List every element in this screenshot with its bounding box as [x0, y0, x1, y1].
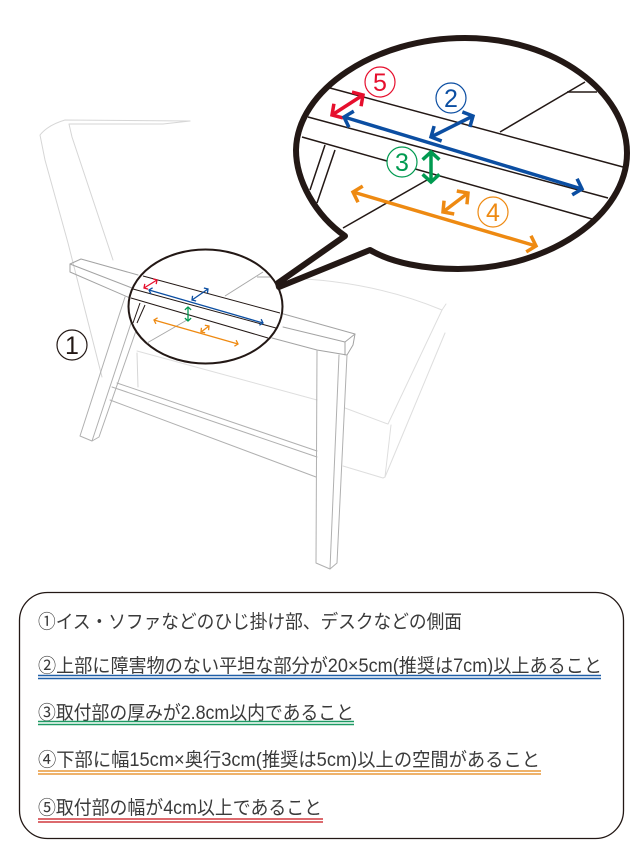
- front right leg: [316, 351, 347, 569]
- arrow 3: thickness: [429, 152, 433, 182]
- bubble outline: [278, 38, 627, 287]
- front left leg: [80, 297, 145, 441]
- arrow 2: flat length: [344, 117, 582, 189]
- number 4: 4: [486, 199, 500, 227]
- arrow 2: flat depth: [431, 116, 473, 137]
- number 4: [478, 197, 508, 227]
- speech bubble with enlarged view: [278, 38, 627, 287]
- arrow 4: space width: [353, 192, 536, 246]
- seat cushion: [137, 278, 446, 478]
- number 3: 3: [395, 149, 409, 177]
- number 3: [387, 147, 417, 177]
- requirement 5: ⑤取付部の幅が4cm以上であること: [38, 797, 322, 819]
- requirement 3: ③取付部の厚みが2.8cm以内であること: [38, 702, 354, 724]
- number 5: [365, 67, 395, 97]
- panel: requirements: [20, 592, 624, 838]
- enlarged armrest lines: [302, 82, 623, 228]
- arrow 5: width: [332, 95, 363, 115]
- inset arrows: [144, 280, 263, 344]
- inset chair lines: [147, 272, 270, 343]
- inset armrest lines: [131, 276, 280, 338]
- armrest: [70, 259, 355, 355]
- small inset circle on armrest: [128, 250, 282, 364]
- requirement 2: ②上部に障害物のない平坦な部分が20×5cm(推奨は7cm)以上あること: [38, 655, 602, 677]
- number 5: 5: [373, 69, 387, 97]
- chair illustration: [40, 120, 446, 569]
- number 2: 2: [444, 85, 458, 113]
- requirement 4: ④下部に幅15cm×奥行3cm(推奨は5cm)以上の空間があること: [38, 749, 540, 771]
- crossbar: [110, 383, 317, 477]
- label 1: [57, 330, 87, 360]
- number 2: [436, 83, 466, 113]
- requirement 1: ①イス・ソファなどのひじ掛け部、デスクなどの側面: [38, 611, 462, 633]
- arrow 4: space depth: [443, 193, 468, 212]
- label 1: 1: [65, 332, 79, 360]
- chair backrest: [40, 120, 190, 387]
